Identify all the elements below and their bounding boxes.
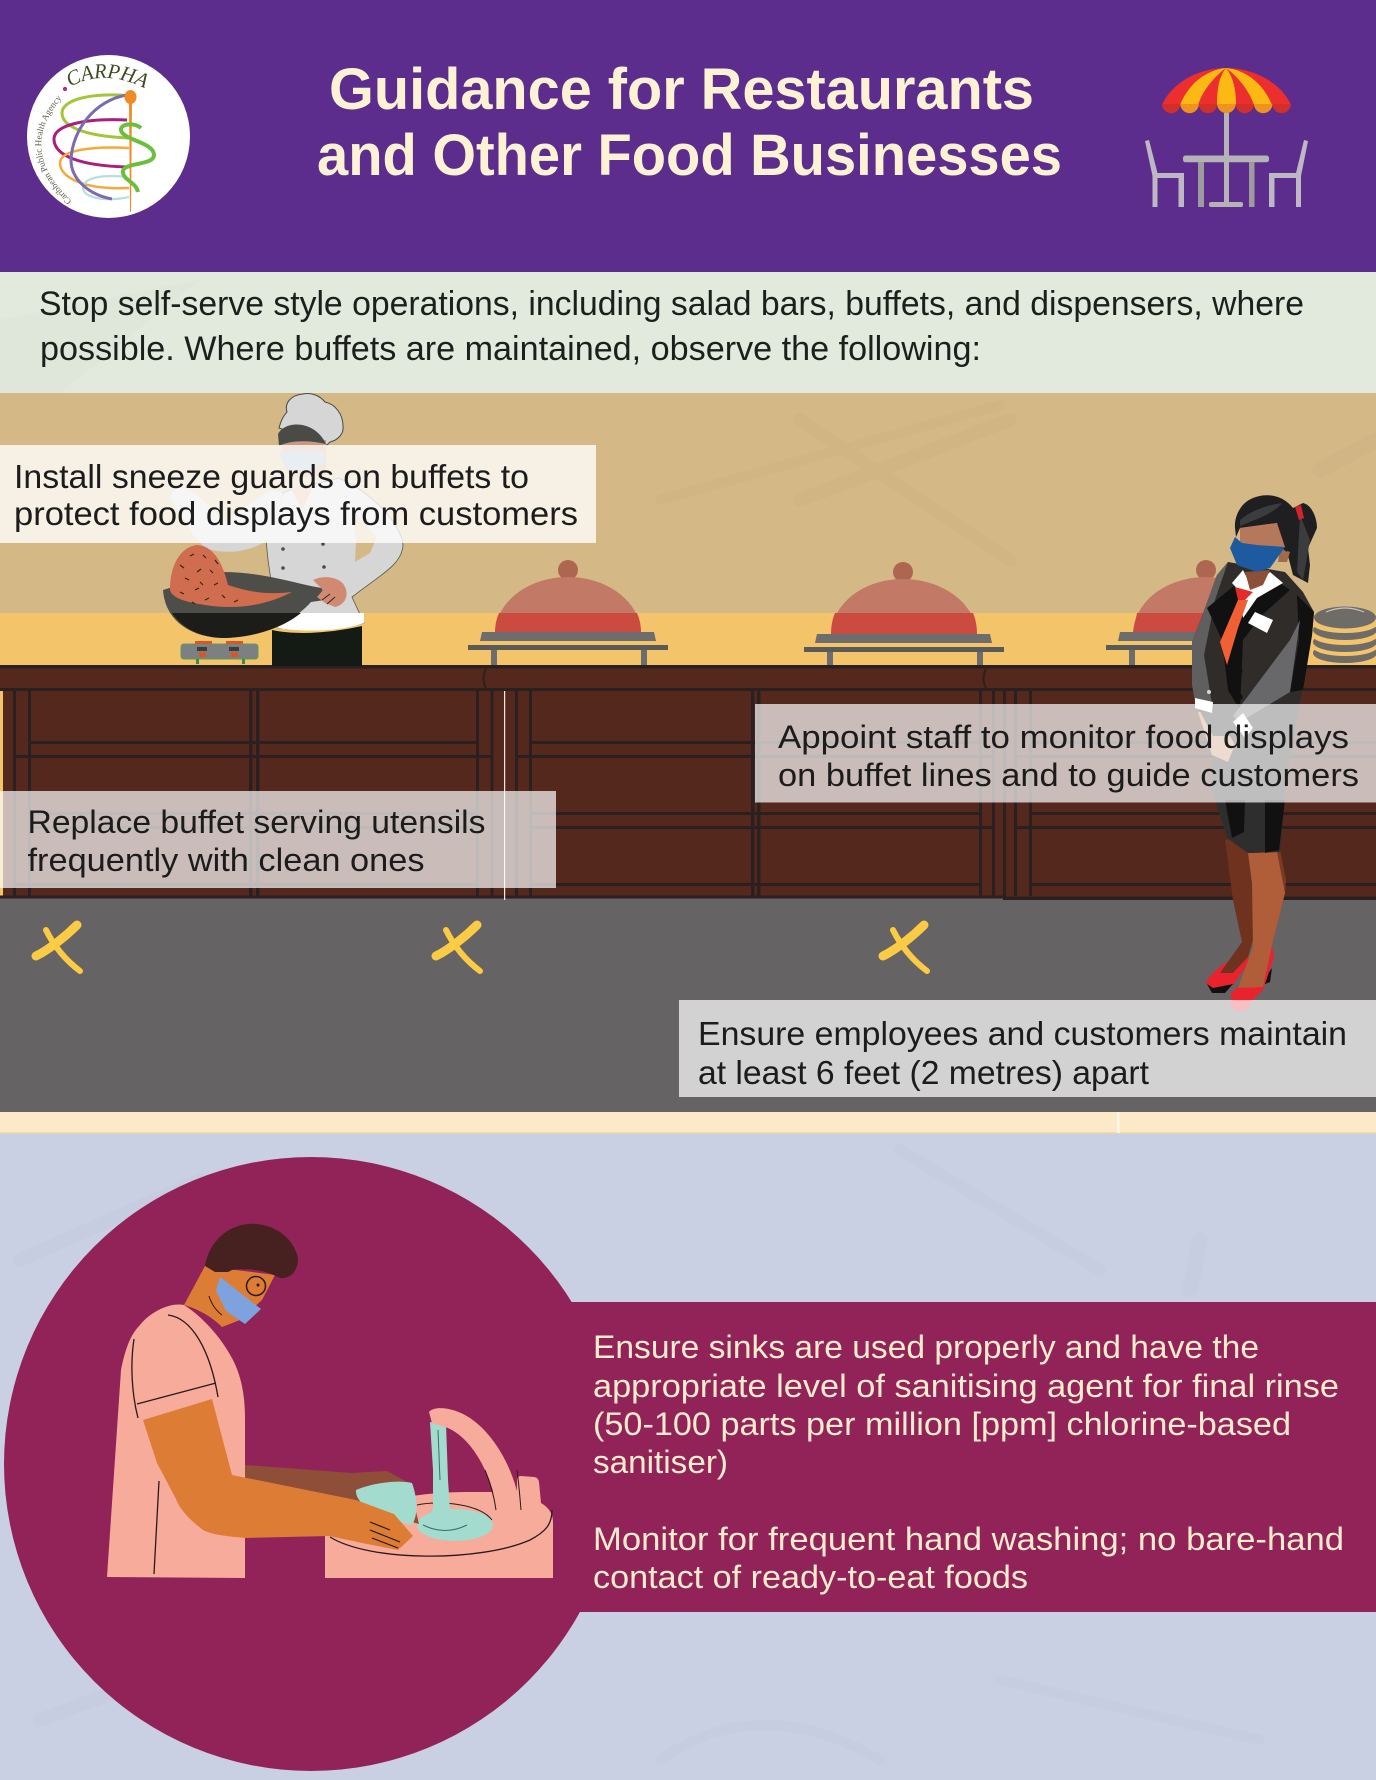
left shoe	[1206, 953, 1249, 990]
callout: replace utensils: Replace buffet serving utensils	[28, 804, 486, 840]
callout: physical distance: Ensure employees and customers maintain	[698, 1016, 1347, 1053]
body	[266, 478, 403, 630]
panel: sink guidance shape	[4, 1157, 1376, 1771]
icon: umbrella, table and chairs	[1145, 68, 1308, 207]
callout: replace utensils: frequently with clean ones	[28, 842, 425, 878]
icon: CARPHA logo: Caribbean Public Health Agency	[35, 96, 71, 204]
icon: floor marker X 2	[436, 925, 480, 971]
panel: intro band	[0, 272, 1376, 393]
icon: serving dome 3	[1106, 560, 1306, 665]
panel: buffet scene background	[0, 393, 1376, 666]
title: and Other Food Businesses	[317, 123, 1062, 188]
icon: serving dome 1	[468, 560, 668, 665]
gap between torso and arm	[352, 510, 377, 562]
text: sink guidance: sanitiser)	[593, 1444, 728, 1480]
text: sink guidance: appropriate level of sanitising agent for final rinse	[593, 1368, 1339, 1404]
pants	[272, 626, 362, 666]
collar	[1232, 570, 1283, 618]
water	[417, 1509, 493, 1541]
stove	[181, 641, 258, 664]
icon: CARPHA logo: CARPHA	[68, 64, 147, 88]
callout: sneeze guards: Install sneeze guards on buffets to	[14, 459, 529, 496]
title	[317, 57, 1062, 188]
text: intro paragraph: Stop self-serve style operations, including salad bars, buffets, and dispensers, where	[39, 285, 1304, 323]
text: sink guidance: Ensure sinks are used properly and have the	[593, 1329, 1259, 1365]
hands	[1198, 712, 1235, 762]
panel: header band	[0, 0, 1376, 272]
icon: serving dome 2	[804, 562, 1004, 665]
callout: physical distance	[679, 1000, 1376, 1097]
tie	[1220, 587, 1253, 665]
food	[170, 545, 292, 607]
front arm	[143, 1399, 413, 1550]
text: intro paragraph	[39, 285, 1304, 368]
face	[1240, 523, 1285, 547]
mask	[1230, 537, 1285, 572]
glasses	[246, 1276, 266, 1296]
badge	[1248, 612, 1273, 633]
callout: replace utensils	[0, 791, 556, 888]
illustration: waitress with mask	[1192, 495, 1317, 1012]
text: sink guidance: Monitor for frequent hand washing; no bare-hand	[593, 1521, 1344, 1557]
skirt	[1212, 735, 1294, 853]
text: sink guidance: (50-100 parts per million [ppm] chlorine-based	[593, 1406, 1291, 1442]
icon: CARPHA logo	[27, 55, 190, 218]
text: sink guidance	[593, 1329, 1344, 1595]
mask	[216, 1277, 261, 1324]
callout: appoint staff	[755, 704, 1376, 802]
panel: buffet counter	[0, 665, 1376, 900]
hat	[279, 393, 343, 445]
illustration: person washing hands	[107, 1224, 553, 1578]
legs	[1220, 837, 1253, 973]
hand	[313, 577, 347, 607]
faucet	[429, 1408, 521, 1510]
panel: lower section background	[0, 1134, 1376, 1780]
text: sink guidance: contact of ready-to-eat foods	[593, 1559, 1028, 1595]
illustration: chef with wok	[163, 393, 403, 666]
divider strip	[0, 1112, 1376, 1134]
back arm	[245, 1465, 419, 1524]
hair	[205, 1224, 298, 1278]
hair	[1235, 495, 1294, 552]
floor	[0, 897, 1376, 1112]
text: intro paragraph: possible. Where buffets are maintained, observe the following:	[40, 330, 981, 368]
neck	[1245, 570, 1270, 590]
jacket	[1192, 562, 1314, 736]
soap	[356, 1482, 416, 1525]
title: Guidance for Restaurants	[329, 57, 1034, 122]
right shoe	[1231, 945, 1274, 1012]
icon: stack of plates	[1313, 606, 1376, 663]
ponytail	[1287, 503, 1317, 583]
face	[282, 440, 326, 478]
callout: appoint staff: Appoint staff to monitor food displays	[778, 719, 1349, 755]
callout: appoint staff: on buffet lines and to guide customers	[778, 757, 1359, 793]
cuffs	[1195, 698, 1213, 713]
callout: physical distance: at least 6 feet (2 metres) apart	[698, 1055, 1150, 1092]
sink	[325, 1476, 553, 1578]
neck	[184, 1266, 275, 1327]
shirt	[107, 1304, 245, 1578]
icon: floor marker X 3	[883, 925, 927, 971]
icon: floor marker X 1	[36, 925, 80, 971]
wok	[163, 572, 325, 638]
callout: sneeze guards	[0, 445, 596, 543]
callout: sneeze guards: protect food displays from customers	[14, 496, 578, 533]
